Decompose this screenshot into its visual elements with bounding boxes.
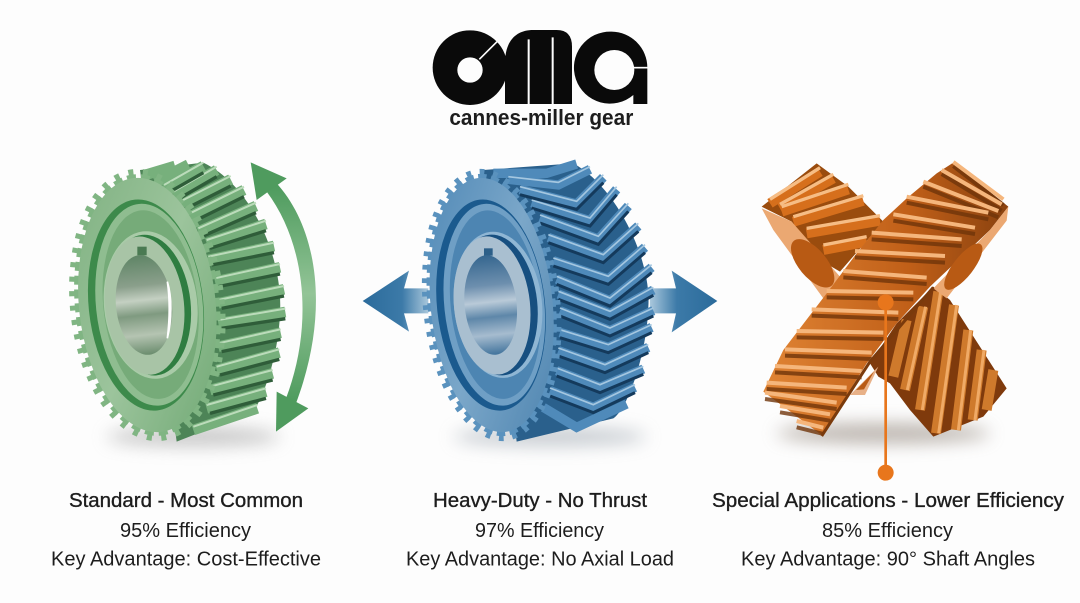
gear teeth ring xyxy=(412,165,571,445)
caption: standard gear: Standard - Most Common xyxy=(69,490,303,512)
logo mark: letter m xyxy=(505,30,572,104)
callout pointer xyxy=(878,294,894,481)
bore xyxy=(111,252,177,358)
logo wordmark: cannes-miller gear xyxy=(449,105,634,130)
lower right gear teeth xyxy=(870,287,1007,437)
gear shadow xyxy=(777,423,990,443)
upper left gear rim xyxy=(762,208,842,298)
upper left gear teeth xyxy=(762,163,883,272)
hub xyxy=(447,227,549,382)
gear body with helical teeth xyxy=(140,163,285,442)
gear teeth ring xyxy=(60,165,235,445)
caption: special applications gear: Key Advantage: 90° Shaft Angles xyxy=(741,548,1035,570)
logo mark: letter a xyxy=(574,32,648,104)
hub xyxy=(97,227,205,383)
gear face xyxy=(418,172,566,438)
front gear teeth xyxy=(763,162,1008,435)
caption: standard gear xyxy=(51,490,321,570)
gear shadow xyxy=(107,427,280,446)
right thrust arrow xyxy=(650,271,717,332)
caption: standard gear: Key Advantage: Cost-Effective xyxy=(51,548,321,570)
caption: heavy-duty gear: Key Advantage: No Axial Load xyxy=(406,548,674,570)
left thrust arrow xyxy=(363,271,428,332)
recessed ring xyxy=(78,194,214,416)
logo xyxy=(433,30,648,130)
gear body with herringbone teeth xyxy=(483,163,653,442)
front gear rim xyxy=(822,207,1008,436)
keyway xyxy=(137,247,147,255)
caption: special applications gear: 85% Efficiency xyxy=(822,520,953,542)
caption: heavy-duty gear: Heavy-Duty - No Thrust xyxy=(433,490,647,512)
panel: blue heavy-duty gear xyxy=(363,163,717,446)
recessed ring xyxy=(426,194,556,416)
panel: orange crossed gears xyxy=(762,162,1008,481)
gear face xyxy=(66,171,229,439)
keyway xyxy=(484,248,493,256)
panel: green standard gear xyxy=(60,162,316,446)
caption: heavy-duty gear xyxy=(406,490,674,570)
caption: heavy-duty gear: 97% Efficiency xyxy=(475,520,604,542)
logo mark: letter o xyxy=(433,30,507,105)
caption: special applications gear: Special Applications - Lower Efficiency xyxy=(712,490,1064,512)
caption: special applications gear xyxy=(712,490,1064,570)
bore xyxy=(460,253,522,357)
rotation arrow xyxy=(251,162,316,432)
caption: standard gear: 95% Efficiency xyxy=(120,520,251,542)
gear shadow xyxy=(453,427,647,446)
